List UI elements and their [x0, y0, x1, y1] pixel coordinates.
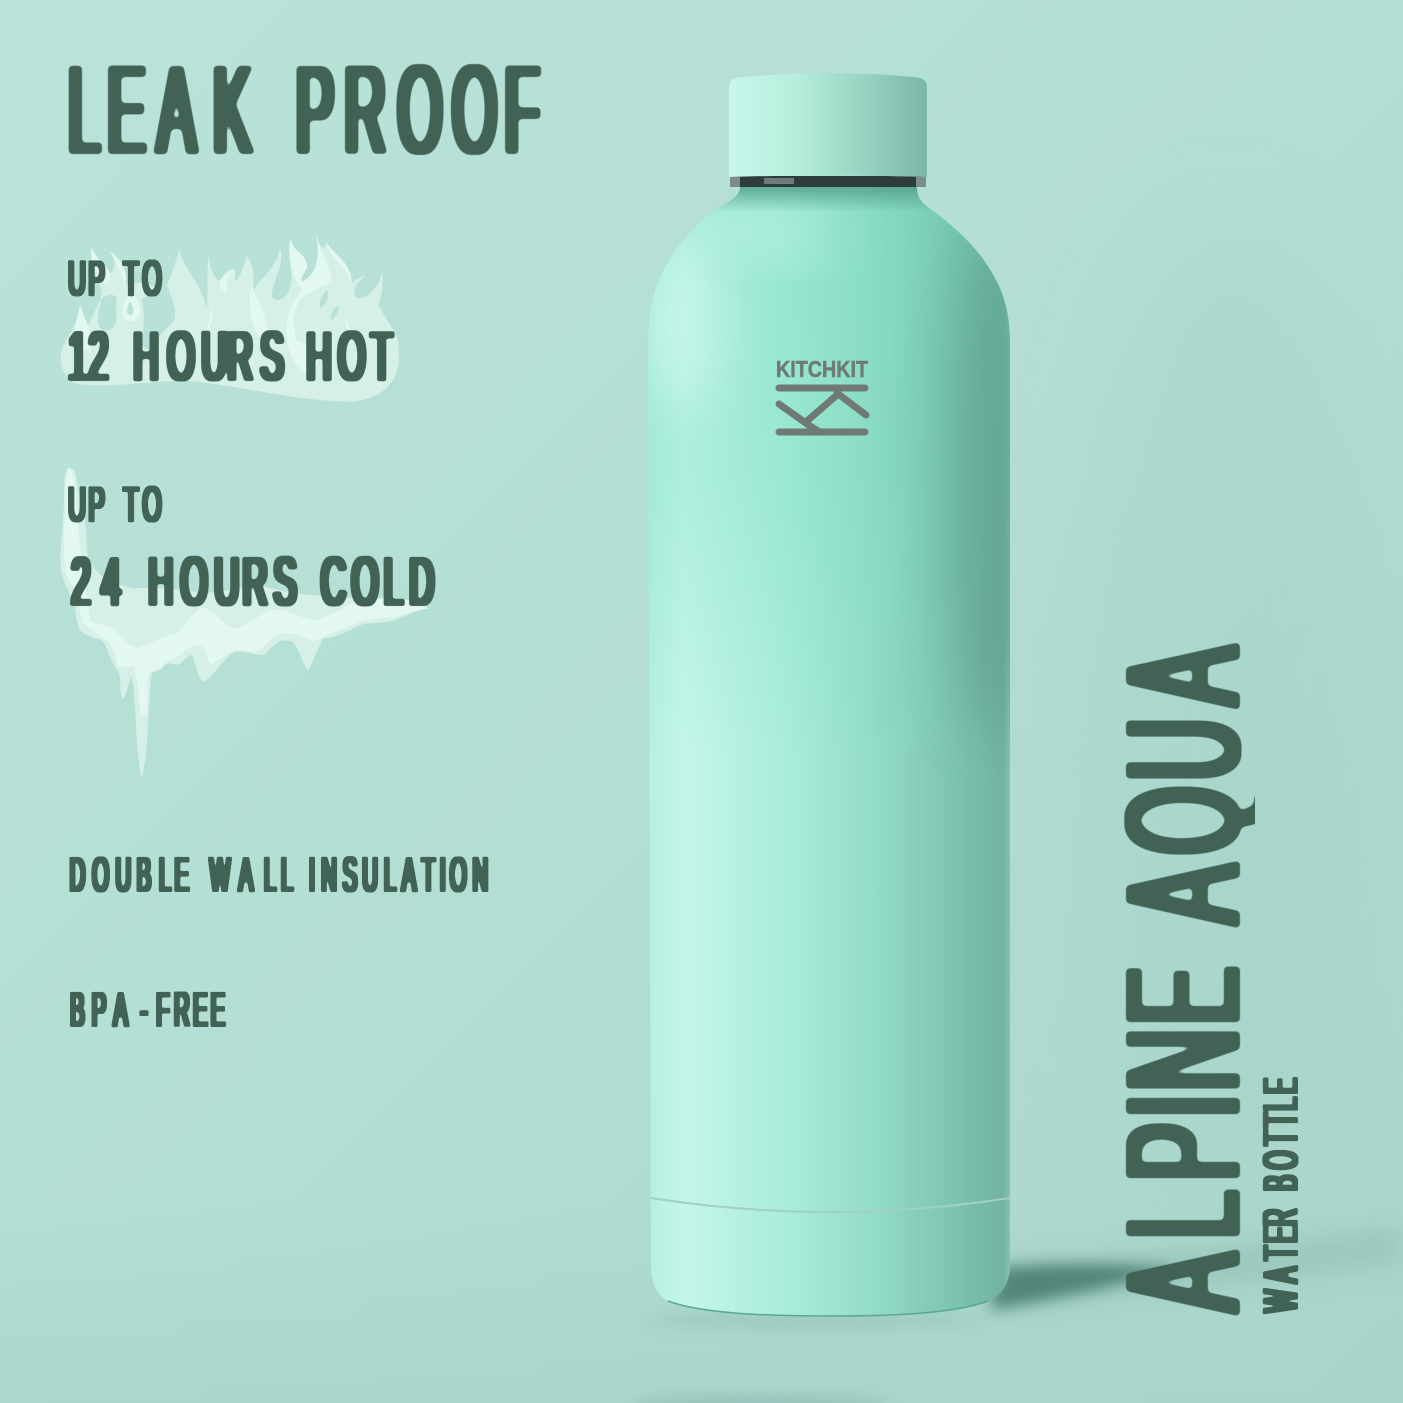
bottom edge [668, 1301, 988, 1316]
flame lower blob [61, 330, 399, 402]
text: up to (hot): UP TO [68, 252, 162, 306]
text: 24 hours cold: 24 HOURS COLD [71, 543, 434, 620]
neck ring [730, 176, 926, 187]
bottle shading [648, 187, 1010, 725]
ice graphic [61, 467, 428, 777]
text: double wall insulation: DOUBLE WALL INSULATION [70, 847, 488, 901]
flames right [227, 233, 398, 377]
bottle shadow [645, 1228, 1403, 1330]
bottle body [648, 187, 1010, 1316]
text: 12 hours hot: 12 HOURS HOT [68, 317, 392, 395]
flame graphic [61, 233, 399, 402]
vertical title: ALPINE AQUA: ALPINE AQUA [1094, 647, 1273, 1312]
base seam [651, 1198, 1010, 1212]
bottle [640, 73, 1040, 1316]
cap [729, 73, 927, 177]
vertical subtitle: WATER BOTTLE: WATER BOTTLE [1255, 1078, 1308, 1312]
logo: KITCHKIT [776, 356, 868, 432]
text: BPA-free: BPA-FREE [70, 982, 225, 1036]
logo: KITCHKIT: KITCHKIT [776, 356, 868, 382]
ice base [61, 467, 428, 777]
flames left [64, 247, 235, 370]
heading: LEAK PROOF: LEAK PROOF [68, 40, 540, 180]
text: up to (cold): UP TO [68, 478, 162, 532]
ice highlight [64, 468, 428, 715]
